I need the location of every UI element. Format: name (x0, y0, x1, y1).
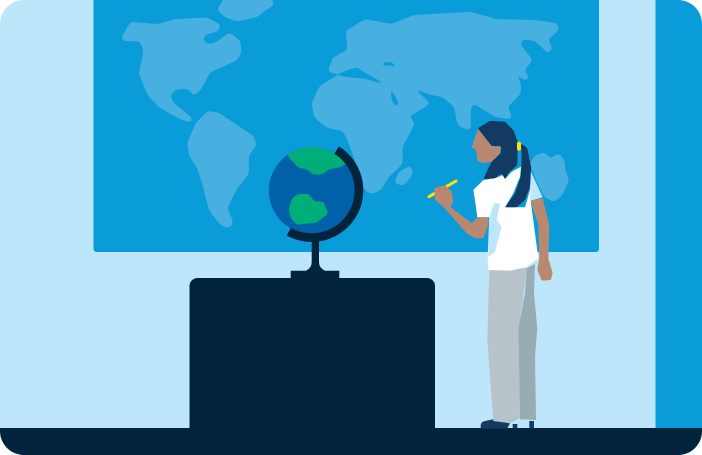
rear arm (531, 198, 553, 281)
hair tie (517, 142, 521, 151)
globe continents (288, 147, 346, 224)
map background (94, 0, 599, 252)
lower landmass (289, 194, 328, 225)
globe (269, 138, 359, 278)
continents: Eurasia, Africa and Australia (313, 13, 568, 201)
world map panel (94, 0, 599, 252)
hair (478, 121, 518, 179)
rear shoe (513, 421, 534, 428)
shirt (473, 167, 538, 271)
Madagascar (395, 167, 412, 184)
top landmass (288, 147, 346, 175)
pen (429, 181, 456, 197)
North America (123, 19, 240, 121)
Greenland (218, 0, 273, 20)
trousers front leg (487, 268, 527, 423)
floor (0, 428, 702, 455)
South America (188, 112, 255, 227)
front arm and hand (434, 185, 488, 238)
continents: Americas and Greenland (123, 0, 273, 227)
shirt fold shadow (488, 203, 502, 257)
woman (429, 121, 553, 428)
trousers rear leg (518, 264, 537, 420)
Australia (531, 154, 568, 201)
right wall band (656, 0, 702, 455)
front shoe (481, 419, 510, 428)
Eurasia (329, 13, 558, 129)
face (472, 128, 501, 163)
display table (190, 278, 435, 438)
globe stand (291, 240, 339, 278)
Africa (313, 77, 414, 193)
sleeve shadow (531, 172, 543, 201)
ponytail (505, 143, 531, 207)
globe meridian arc (289, 150, 359, 238)
globe sphere (269, 147, 356, 234)
